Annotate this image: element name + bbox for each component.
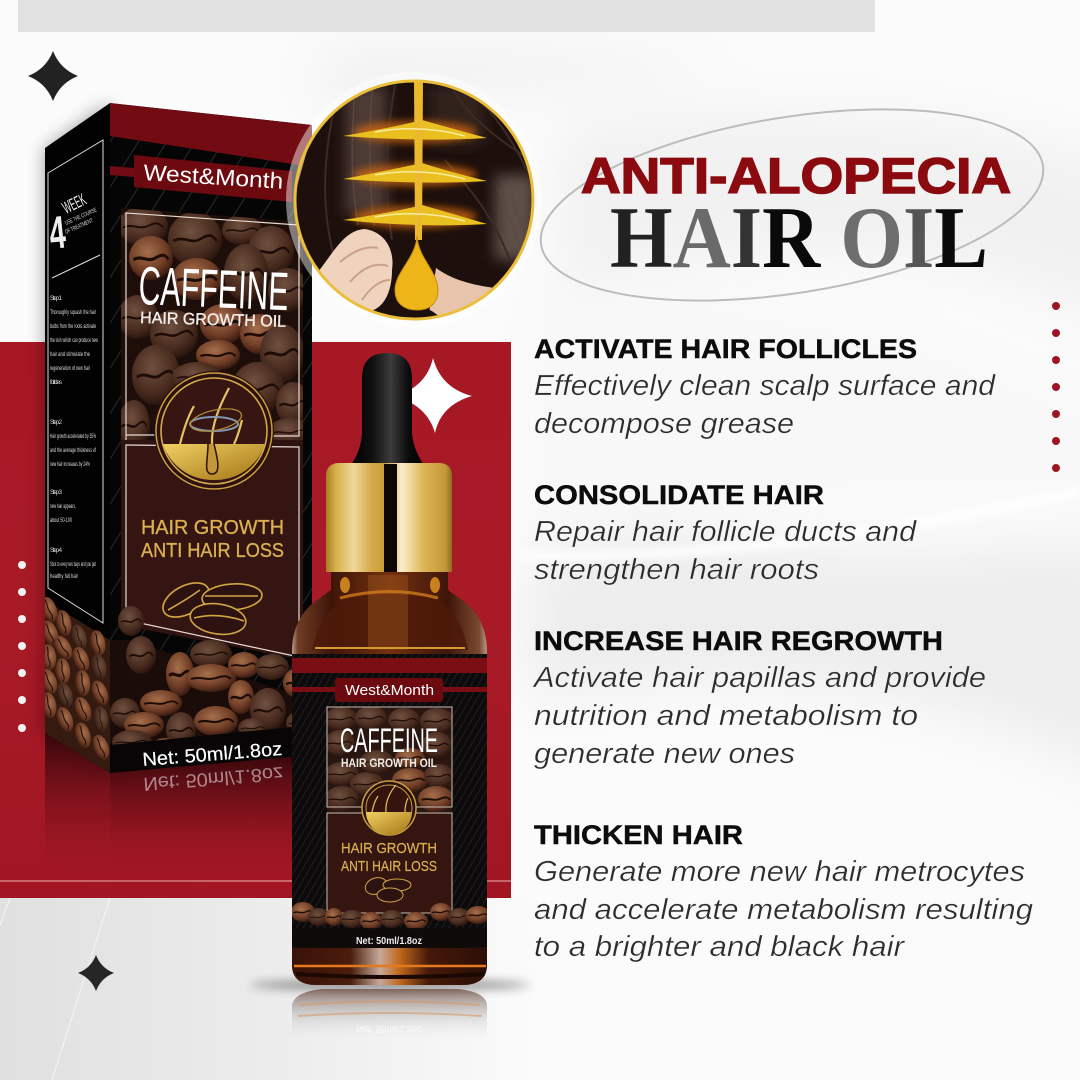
box side panel: Stick to every two days and you get — [50, 562, 96, 568]
box side panel: Thoroughly squash the hair — [50, 310, 96, 316]
label gold beans — [363, 875, 411, 902]
benefit: consolidate hair: strengthen hair roots — [534, 554, 819, 586]
hand — [297, 152, 492, 316]
brand tag — [134, 155, 292, 202]
benefit: activate hair follicles: decompose grease — [534, 408, 794, 440]
box side panel: Step 4 — [50, 548, 63, 554]
label brand tag: West&Month — [345, 683, 434, 699]
oil highlights — [312, 575, 468, 650]
gold bean sketch — [162, 582, 263, 636]
red lid stripes — [110, 103, 312, 167]
box side panel: new hair increases by 24% — [50, 462, 90, 468]
oil drop — [395, 236, 438, 310]
box reflection — [45, 733, 312, 890]
icon: white sparkle — [394, 358, 472, 433]
bottle reflection — [292, 989, 487, 1045]
dots: left — [18, 561, 26, 732]
box side panel: new hair appears, — [50, 504, 76, 510]
box side panel: 4 — [47, 206, 68, 259]
dots: right — [1052, 302, 1060, 472]
bottom beans — [110, 606, 292, 773]
box side panel: and the average thickness of — [50, 448, 96, 454]
golden oil line — [414, 80, 423, 240]
benefit: thicken hair: and accelerate metabolism resulting — [534, 894, 1033, 926]
bottle base — [292, 948, 487, 985]
box side panel: Step 2 — [50, 420, 63, 426]
side beans — [45, 597, 110, 773]
label claim: HAIR GROWTH — [341, 841, 437, 857]
box side panel: WEEK — [59, 190, 90, 218]
benefit: consolidate hair — [534, 480, 917, 586]
box reflection: Net: 50ml/1.8oz — [143, 762, 284, 794]
benefit: activate hair follicles — [534, 334, 996, 440]
bottle reflection: Net: 50ml/1.8oz — [356, 1023, 422, 1034]
hair circle — [286, 72, 542, 328]
box side panel: Hair growth accelerated by 35% — [50, 434, 96, 440]
box side panel: Step 3 — [50, 490, 63, 496]
coffee bean photo panel — [121, 208, 303, 440]
benefit: thicken hair: Generate more new hair metrocytes — [534, 856, 1025, 888]
label beans row — [291, 902, 490, 930]
box side panel: OF TREATMENT — [64, 218, 94, 236]
benefit: increase hair regrowth — [532, 626, 986, 770]
net volume band — [110, 727, 292, 773]
oil glow lines — [343, 120, 487, 228]
bottle shadow — [250, 980, 530, 990]
red panel — [0, 342, 511, 898]
box front panel — [108, 100, 320, 780]
icon: black sparkle bottom — [78, 955, 114, 991]
benefit: thicken hair — [534, 820, 1033, 963]
title: hair oil: HAIR OIL — [610, 190, 988, 287]
hair growth claim: HAIR GROWTH — [141, 517, 284, 539]
label net band — [292, 928, 487, 948]
box shadow — [45, 103, 110, 775]
brand tag: West&Month — [143, 160, 284, 194]
benefit: increase hair regrowth: nutrition and metabolism to — [534, 700, 918, 732]
box side panel: USE THE COURSE — [64, 208, 98, 227]
box side panel: Step 1 — [50, 296, 63, 302]
hair growth oil subtitle: HAIR GROWTH OIL — [140, 309, 286, 331]
bottle label — [291, 654, 490, 948]
glass body — [292, 572, 487, 985]
title: anti-alopecia: ANTI-ALOPECIA — [581, 148, 1011, 204]
hair emblem — [154, 371, 274, 491]
label subtitle: HAIR GROWTH OIL — [341, 758, 437, 770]
top grey bar — [18, 0, 875, 32]
oil gleam — [375, 129, 465, 221]
label caffeine title: CAFFEINE — [340, 722, 438, 760]
bottle — [250, 353, 530, 1045]
box side panel — [45, 103, 110, 773]
product box — [37, 100, 320, 890]
box front panel: ANTI HAIR LOSS — [141, 540, 284, 562]
benefit: increase hair regrowth: INCREASE HAIR REGROWTH — [534, 626, 943, 656]
box side panel: the skin which can produce new — [50, 338, 98, 344]
benefit: thicken hair: THICKEN HAIR — [534, 820, 743, 850]
brown lower panel — [121, 440, 303, 660]
icon: black sparkle top — [28, 51, 78, 101]
label bean panel — [325, 706, 454, 813]
benefit: increase hair regrowth: generate new ones — [534, 738, 795, 770]
box side panel: hair and stimulate the — [50, 352, 90, 358]
benefit: thicken hair: to a brighter and black hair — [534, 931, 905, 963]
label lower panel — [327, 813, 452, 913]
box side panel: bulbs from the roots activate — [50, 324, 96, 330]
label net band: Net: 50ml/1.8oz — [356, 935, 422, 947]
bottle label: ANTI HAIR LOSS — [341, 859, 437, 875]
benefit: activate hair follicles: ACTIVATE HAIR FOLLICLES — [534, 334, 917, 364]
gold collar — [326, 463, 452, 572]
title oval — [527, 78, 1057, 332]
benefit: activate hair follicles: Effectively clean scalp surface and — [534, 370, 996, 402]
benefit: consolidate hair: Repair hair follicle ducts and — [534, 516, 917, 548]
benefit: consolidate hair: CONSOLIDATE HAIR — [534, 480, 824, 510]
caffeine title: CAFFEINE — [137, 256, 290, 322]
box side panel: follicles — [50, 380, 62, 386]
dropper bulb — [352, 353, 423, 464]
net volume band: Net: 50ml/1.8oz — [142, 739, 283, 771]
label brand tag — [335, 678, 443, 702]
benefit: increase hair regrowth: Activate hair papillas and provide — [532, 662, 986, 694]
label emblem — [362, 781, 416, 835]
box side panel: about 50-100 — [50, 518, 72, 524]
box side panel: healthy full hair — [50, 574, 78, 580]
box side panel: regeneration of new hair — [50, 366, 90, 372]
